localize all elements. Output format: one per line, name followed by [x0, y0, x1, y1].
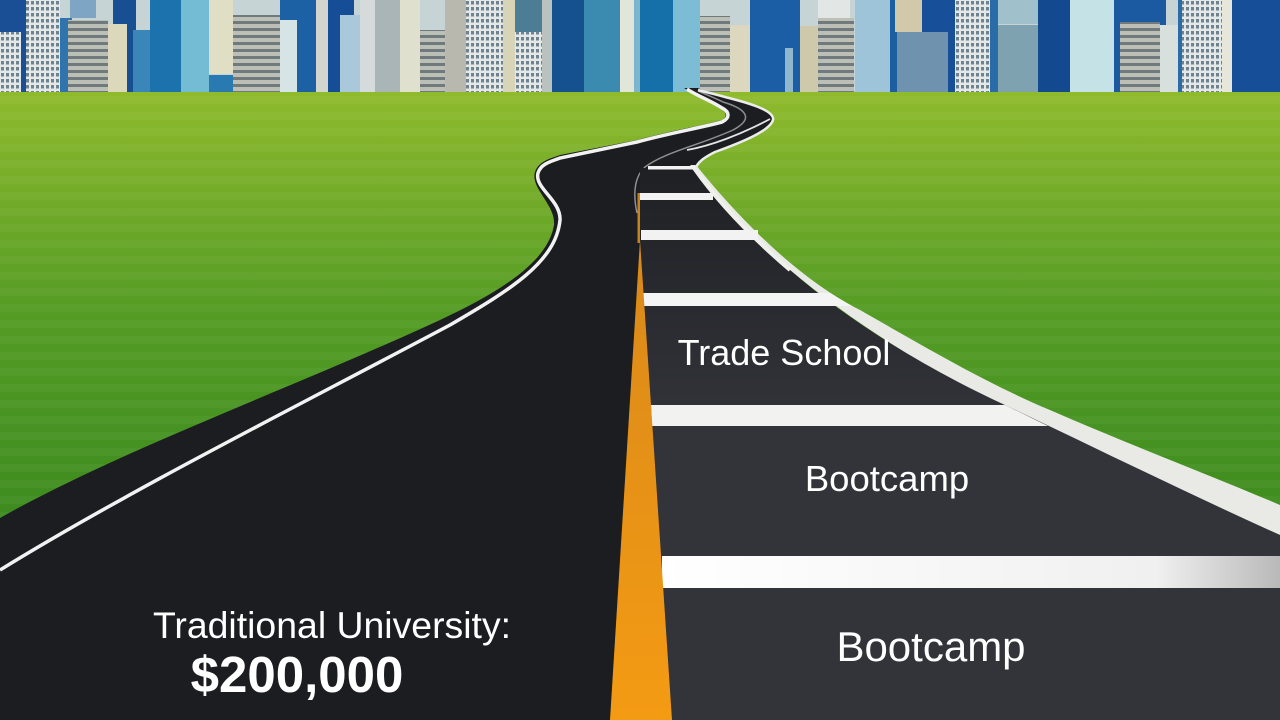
label: bootcamp upper: Bootcamp — [805, 458, 969, 499]
label: traditional university cost: Traditional University: — [153, 604, 511, 646]
right road: alternative paths — [640, 165, 1280, 720]
label: bootcamp lower: Bootcamp — [836, 623, 1026, 670]
label: trade school: Trade School — [678, 332, 890, 373]
orange divider line — [610, 193, 672, 720]
label: traditional university cost: $200,000 — [191, 646, 403, 703]
city skyline — [0, 0, 1280, 93]
label: traditional university cost — [153, 604, 511, 703]
left road: traditional university — [0, 88, 774, 720]
